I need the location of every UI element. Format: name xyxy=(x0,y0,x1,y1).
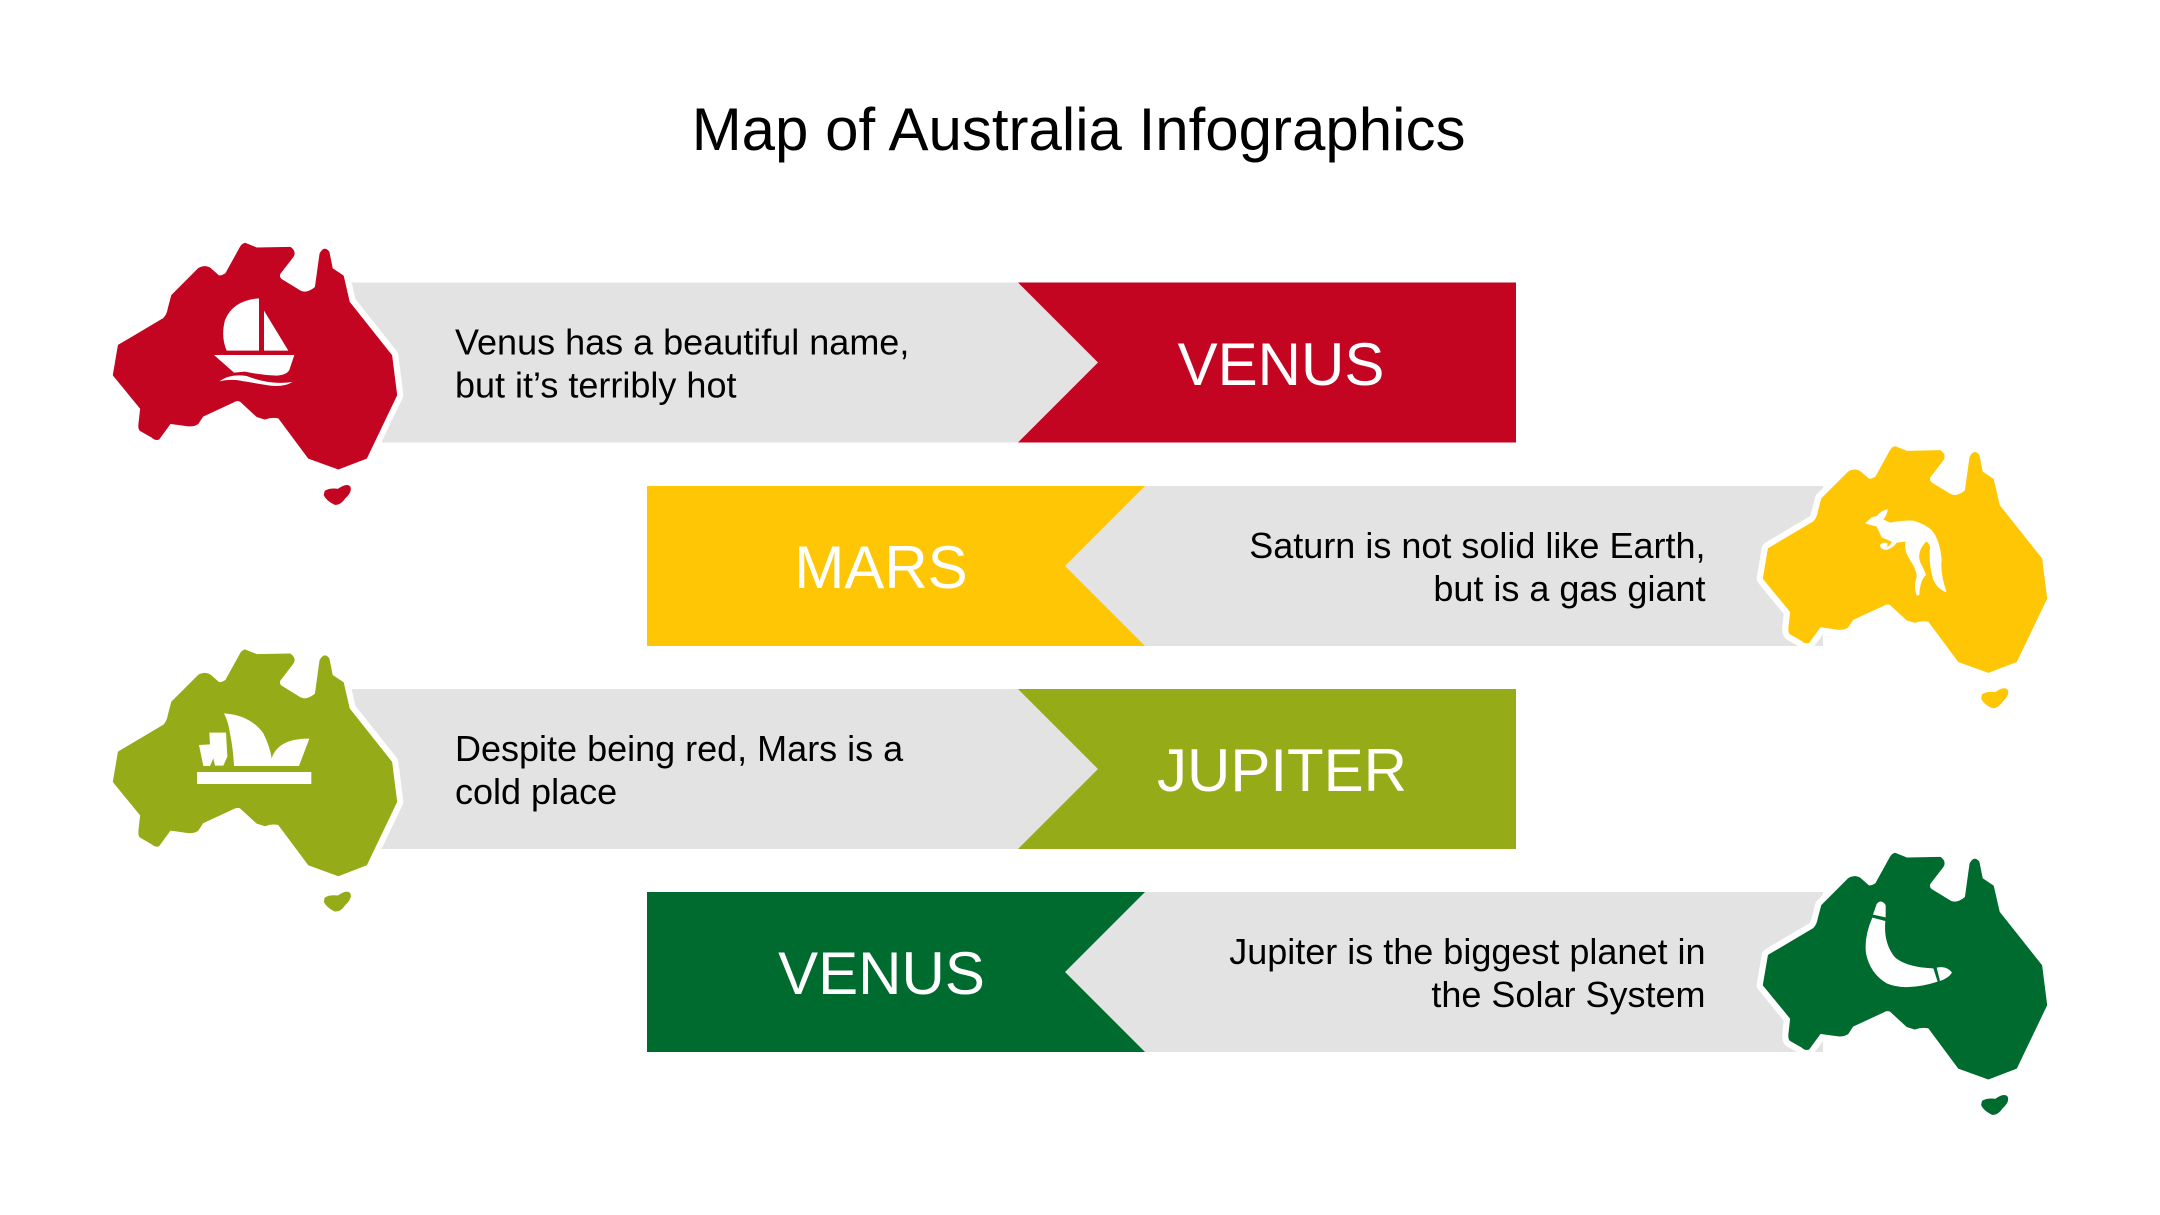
chevron label block xyxy=(647,892,1145,1052)
text band xyxy=(340,689,1100,849)
label: JUPITER xyxy=(1157,737,1407,804)
chevron label block xyxy=(1018,282,1516,442)
map with opera house icon xyxy=(114,651,396,910)
description: Jupiter is the biggest planet in xyxy=(1229,931,1706,972)
chevron label block xyxy=(647,486,1145,646)
description: cold place xyxy=(455,771,617,812)
description: but it’s terribly hot xyxy=(455,364,736,406)
text band xyxy=(1060,892,1823,1052)
map with sailboat icon xyxy=(114,244,396,504)
panel: row 3 jupiter xyxy=(114,651,1516,910)
description: but is a gas giant xyxy=(1433,568,1706,609)
description: Despite being red, Mars is a xyxy=(455,728,904,769)
description: Venus has a beautiful name, xyxy=(455,322,909,362)
panel: row 4 venus xyxy=(647,854,2046,1114)
icon: sailboat xyxy=(214,298,294,386)
chevron label block xyxy=(1018,689,1516,849)
icon: opera house xyxy=(197,713,311,784)
icon: boomerang xyxy=(1866,902,1952,987)
text band xyxy=(340,282,1100,442)
map with boomerang icon xyxy=(1764,854,2046,1114)
description: Saturn is not solid like Earth, xyxy=(1249,525,1706,566)
title: Map of Australia Infographics xyxy=(692,96,1465,163)
panel: row 1 venus xyxy=(114,244,1516,504)
panel: row 2 mars xyxy=(647,447,2046,707)
icon: kangaroo xyxy=(1865,509,1947,596)
description: the Solar System xyxy=(1431,974,1706,1015)
label: MARS xyxy=(794,534,968,601)
label: VENUS xyxy=(778,940,985,1007)
text band xyxy=(1060,486,1823,646)
label: VENUS xyxy=(1178,331,1384,398)
map with kangaroo icon xyxy=(1764,447,2046,707)
